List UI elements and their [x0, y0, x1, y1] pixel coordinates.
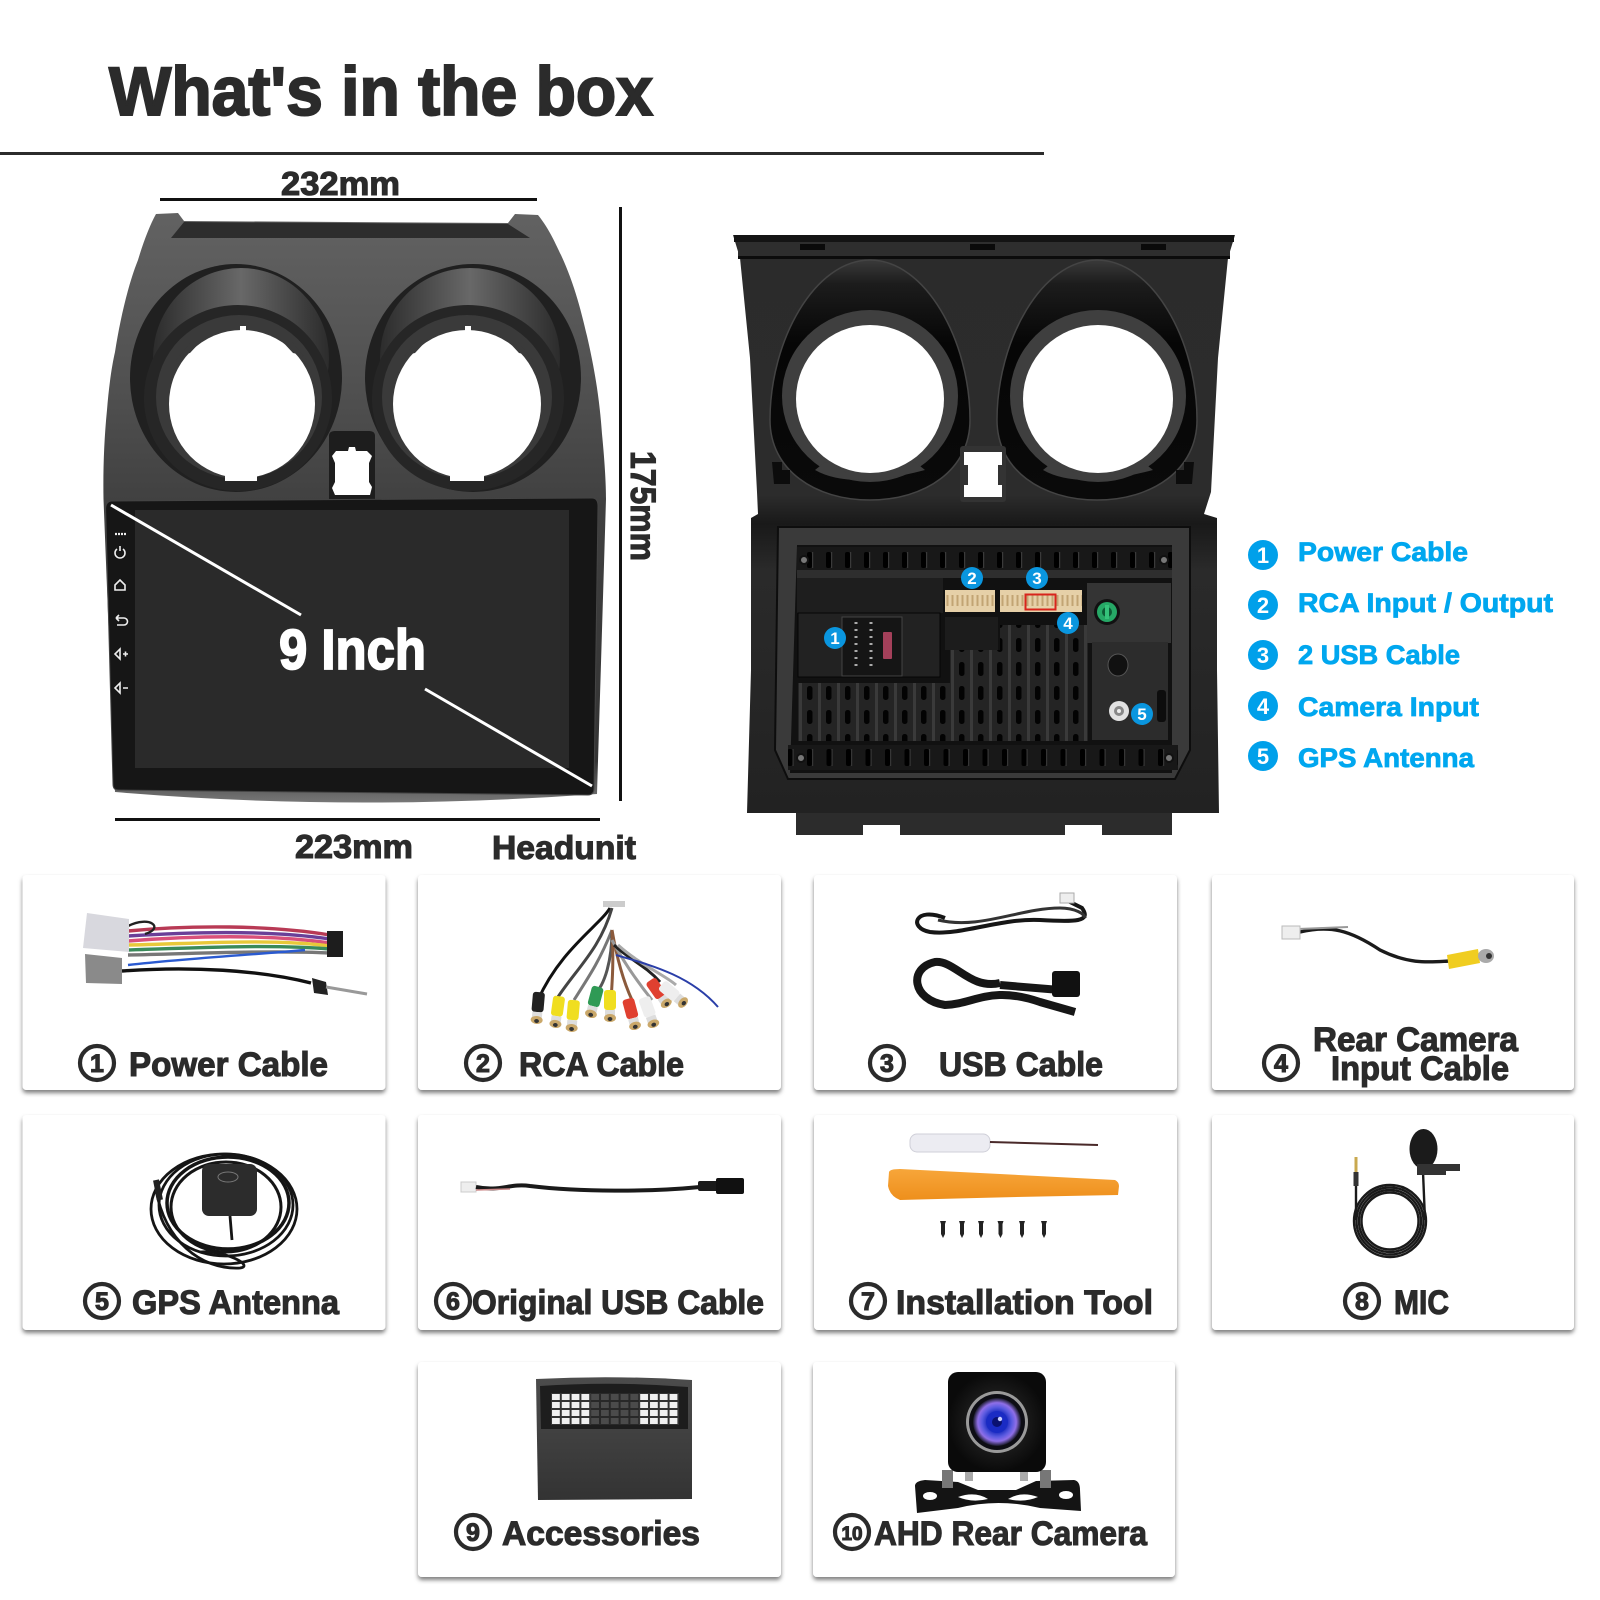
dimension: 232mm width — [160, 165, 537, 202]
centre clip opening — [329, 431, 375, 499]
legend: power cable: 1 — [1257, 543, 1269, 568]
fascia panel — [103, 213, 606, 803]
callout 1: 1 — [830, 629, 840, 648]
card 6: original USB cable — [418, 1115, 781, 1330]
port legend — [1248, 537, 1553, 773]
dimension: 223mm width: 223mm — [295, 828, 413, 865]
camera body — [948, 1372, 1046, 1472]
callout 4: 4 — [1063, 614, 1073, 633]
callout 3 — [1026, 567, 1048, 589]
label: 5 — [95, 1288, 109, 1316]
label: Original USB Cable — [472, 1284, 764, 1322]
callout 1 — [824, 627, 846, 649]
icon: short USB cable — [461, 1178, 744, 1194]
rear chassis — [775, 527, 1190, 779]
side buttons — [115, 534, 128, 693]
label: Installation Tool — [896, 1284, 1153, 1322]
icon: RCA bundle — [530, 901, 718, 1032]
callout 5: 5 — [1137, 705, 1147, 724]
legend: GPS: GPS Antenna — [1298, 743, 1475, 773]
label: 7 — [861, 1288, 875, 1316]
legend: camera: Camera Input — [1298, 692, 1479, 722]
legend: power cable: Power Cable — [1298, 537, 1468, 567]
legend: USB: 2 USB Cable — [1298, 640, 1460, 670]
legend: GPS: 5 — [1257, 744, 1269, 769]
label: MIC — [1394, 1284, 1449, 1322]
rear side clips — [772, 462, 1194, 484]
headunit front view — [103, 213, 606, 803]
rear frame — [733, 235, 1235, 813]
title: What's in the box — [109, 53, 653, 130]
card 10: AHD rear camera — [813, 1362, 1175, 1577]
icon: RCA camera cable — [1282, 926, 1494, 969]
icon: accessory panel — [536, 1377, 692, 1500]
card 3: USB cable — [814, 875, 1177, 1090]
legend: RCA: RCA Input / Output — [1298, 588, 1553, 618]
bottom tabs — [796, 813, 1172, 835]
card 5: GPS antenna — [22, 1115, 386, 1330]
dimension: 232mm width: 232mm — [281, 165, 400, 202]
label: 4 — [1274, 1050, 1288, 1078]
label: 1 — [90, 1050, 104, 1078]
icon: power harness — [83, 913, 367, 995]
label — [1264, 1021, 1519, 1088]
card 2: RCA cable — [418, 875, 781, 1090]
label: Accessories — [502, 1515, 700, 1553]
right upper block — [1087, 583, 1171, 643]
title — [0, 53, 1044, 155]
label: 2 — [476, 1050, 490, 1078]
icon: screws — [940, 1221, 1047, 1238]
headunit rear view — [733, 235, 1235, 835]
power block — [798, 613, 940, 677]
dimension: 175mm height — [619, 207, 662, 801]
label: Rear Camera — [1313, 1021, 1519, 1059]
icon: GPS antenna — [151, 1154, 297, 1268]
dimension: 223mm width — [115, 818, 600, 865]
label — [870, 1046, 1103, 1084]
icon: lapel mic — [1354, 1129, 1460, 1257]
label: 3 — [880, 1050, 894, 1078]
card 1: power cable — [22, 875, 386, 1090]
left gauge ring — [130, 264, 342, 492]
card 9: accessories — [418, 1362, 781, 1577]
legend: camera: 4 — [1257, 694, 1270, 719]
lower fins — [798, 683, 950, 741]
label: AHD Rear Camera — [874, 1515, 1148, 1553]
label: Input Cable — [1331, 1050, 1509, 1088]
card 7: installation tool — [814, 1115, 1177, 1330]
callout 2: 2 — [967, 569, 977, 588]
lens — [966, 1391, 1028, 1453]
right lower block — [1092, 642, 1168, 740]
dimension: 175mm height: 175mm — [623, 451, 662, 561]
USB and camera connectors — [1000, 590, 1082, 612]
screen size label: 9 Inch — [279, 618, 426, 682]
label — [1345, 1284, 1449, 1322]
bottom vent — [788, 745, 1178, 770]
label: Power Cable — [129, 1046, 328, 1084]
RCA connector — [945, 590, 995, 612]
callout 3: 3 — [1032, 569, 1042, 588]
card 4: rear camera input cable — [1212, 875, 1574, 1090]
icon: screwdriver — [910, 1134, 1098, 1152]
label: RCA Cable — [519, 1046, 684, 1084]
screen — [106, 498, 598, 795]
label: USB Cable — [939, 1046, 1103, 1084]
label: GPS Antenna — [132, 1284, 340, 1322]
label: 9 — [466, 1519, 480, 1547]
callout 4 — [1057, 612, 1079, 634]
legend: USB: 3 — [1257, 643, 1269, 668]
icon: USB cables — [917, 893, 1085, 1012]
legend: RCA: 2 — [1257, 593, 1269, 618]
mounting bracket — [915, 1480, 1081, 1513]
callout 5 — [1131, 703, 1153, 725]
green antenna port — [1094, 599, 1120, 625]
top vent — [171, 222, 530, 238]
centre block — [945, 617, 998, 650]
label: 8 — [1355, 1288, 1369, 1316]
top vent — [797, 547, 1172, 570]
middle fins — [950, 650, 1000, 741]
icon: camera — [915, 1372, 1081, 1513]
card 8: MIC — [1212, 1115, 1574, 1330]
heading: Headunit: Headunit — [492, 829, 636, 866]
right gauge ring — [365, 264, 581, 492]
mounting screws — [797, 556, 1173, 762]
legend: power cable — [1248, 537, 1468, 570]
icon: pry tool — [888, 1169, 1119, 1200]
tall fins — [1000, 625, 1088, 741]
GPS port — [1109, 701, 1129, 721]
label: 10 — [842, 1524, 862, 1545]
callout 2 — [961, 567, 983, 589]
rear clip opening — [960, 446, 1006, 502]
diagonal size line — [111, 505, 592, 786]
rear right gauge opening — [997, 260, 1197, 500]
top ledge — [734, 235, 1234, 259]
rear left gauge opening — [770, 260, 970, 500]
mounting bolts — [942, 1470, 953, 1488]
red highlight — [1026, 594, 1056, 610]
label: 6 — [446, 1288, 460, 1316]
